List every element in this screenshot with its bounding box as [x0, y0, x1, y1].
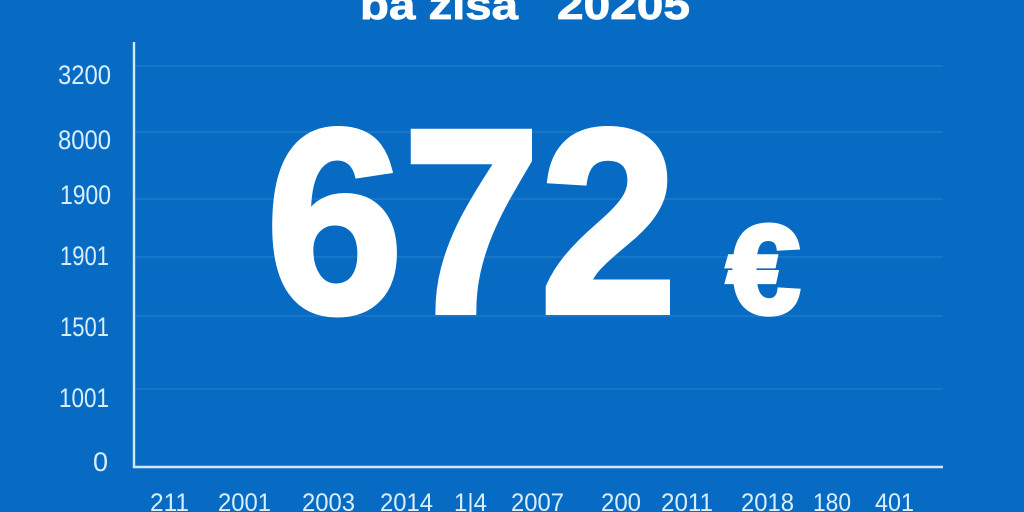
chart axes	[134, 42, 943, 467]
y axis labels: 3200	[58, 60, 111, 90]
big value: 672	[266, 75, 677, 368]
y axis labels: 1900	[60, 180, 111, 210]
y axis labels: 0	[93, 447, 108, 477]
y axis labels: 1901	[60, 241, 109, 271]
y axis labels: 1001	[59, 383, 109, 413]
y axis labels: 8000	[58, 125, 111, 155]
euro symbol: €	[727, 199, 800, 340]
y axis labels	[58, 60, 111, 477]
x axis labels	[150, 489, 914, 512]
title	[360, 0, 690, 28]
y axis labels: 1501	[60, 312, 109, 342]
